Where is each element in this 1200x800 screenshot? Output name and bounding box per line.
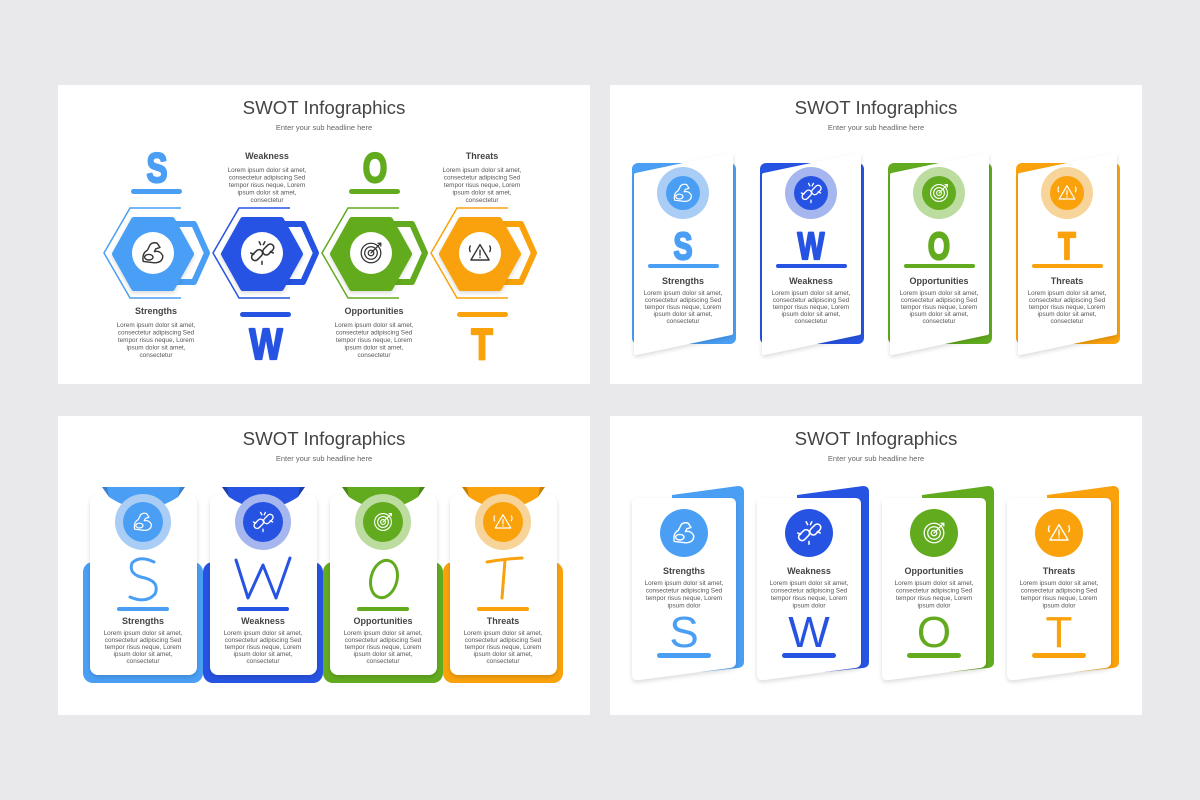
card: weakness: ipsum dolor sit amet,	[234, 651, 293, 658]
card: strengths: ipsum dolor sit amet,	[114, 651, 173, 658]
card: weakness: ipsum dolor sit amet,	[782, 311, 841, 318]
item: threats hexagon: Threats	[466, 151, 498, 161]
card: opportunities: consectetur adipiscing Sed	[901, 297, 978, 304]
card: strengths: consectetur	[666, 318, 700, 325]
subtitle: Enter your sub headline here	[828, 454, 924, 463]
card: weakness: Lorem ipsum dolor sit amet,	[772, 290, 851, 297]
item: threats hexagon	[431, 151, 534, 369]
card: strengths: consectetur adipiscing Sed	[105, 637, 182, 644]
item: opportunities hexagon: consectetur adipiscing Sed	[336, 330, 413, 336]
card: strengths: Lorem ipsum dolor sit amet,	[644, 290, 723, 297]
item: threats hexagon: consectetur adipiscing Sed	[444, 174, 521, 182]
card: strengths	[83, 487, 203, 683]
card: weakness: W	[788, 608, 830, 657]
card: threats: consectetur adipiscing Sed	[1029, 297, 1106, 304]
card: strengths	[632, 486, 744, 680]
card: threats: consectetur adipiscing Sed	[1021, 588, 1098, 594]
card: threats	[443, 487, 563, 683]
card: weakness: Weakness	[787, 566, 831, 576]
card: strengths: S	[673, 226, 693, 268]
card: threats: Threats	[487, 616, 519, 626]
card: weakness: Weakness	[789, 276, 833, 286]
card: strengths: tempor risus neque, Lorem	[646, 595, 722, 602]
card: opportunities	[323, 487, 443, 683]
card: opportunities: Lorem ipsum dolor sit amet,	[895, 580, 974, 587]
item: strengths hexagon: S	[146, 144, 168, 191]
card: opportunities: ipsum dolor	[917, 602, 951, 610]
item: weakness hexagon	[213, 151, 316, 369]
card: opportunities: Opportunities	[354, 616, 412, 626]
item: opportunities hexagon	[322, 144, 425, 359]
item: opportunities hexagon: Lorem ipsum dolor sit amet,	[335, 322, 414, 329]
card: threats: Lorem ipsum dolor sit amet,	[464, 630, 543, 637]
card: weakness: W	[798, 226, 825, 268]
item: weakness hexagon: consectetur	[250, 197, 284, 204]
card: strengths: ipsum dolor	[667, 602, 701, 610]
item: strengths hexagon: tempor risus neque, Lorem	[118, 337, 194, 344]
card: strengths: consectetur adipiscing Sed	[645, 297, 722, 304]
item: weakness hexagon: Weakness	[245, 151, 289, 161]
item: weakness hexagon: tempor risus neque, Lorem	[229, 182, 305, 189]
card: strengths: Strengths	[122, 616, 164, 626]
item: weakness hexagon: W	[249, 320, 283, 369]
card: threats	[1016, 155, 1120, 353]
card: opportunities: O	[928, 226, 950, 268]
card: opportunities: tempor risus neque, Lorem	[345, 644, 421, 651]
card: weakness	[203, 487, 323, 683]
card: strengths: Strengths	[662, 276, 704, 286]
card: threats: ipsum dolor sit amet,	[474, 651, 533, 658]
card: threats	[1007, 486, 1119, 680]
card: threats: Lorem ipsum dolor sit amet,	[1020, 580, 1099, 587]
card: opportunities: consectetur	[922, 318, 956, 325]
card: weakness: consectetur	[246, 658, 280, 665]
card: weakness: Lorem ipsum dolor sit amet,	[770, 580, 849, 587]
panel: hexagon SWOT	[58, 85, 590, 384]
panel: ribbon cards SWOT	[58, 416, 590, 715]
card: strengths: ipsum dolor sit amet,	[654, 311, 713, 318]
card: threats: tempor risus neque, Lorem	[1021, 595, 1097, 602]
item: strengths hexagon: consectetur	[139, 352, 173, 359]
card: opportunities	[882, 486, 994, 680]
card: threats: ipsum dolor sit amet,	[1038, 311, 1097, 318]
card: weakness: consectetur adipiscing Sed	[225, 637, 302, 644]
item: threats hexagon: T	[471, 320, 493, 369]
item: strengths hexagon: consectetur adipiscing Sed	[118, 330, 195, 336]
card: opportunities: ipsum dolor sit amet,	[354, 651, 413, 658]
card: threats: consectetur	[1050, 318, 1084, 325]
card: opportunities: consectetur adipiscing Sed	[896, 588, 973, 594]
item: weakness hexagon: ipsum dolor sit amet,	[238, 190, 297, 196]
item: opportunities hexagon: O	[363, 144, 387, 191]
card: opportunities: tempor risus neque, Lorem	[896, 595, 972, 602]
card: threats: consectetur	[486, 658, 520, 665]
card: opportunities: Lorem ipsum dolor sit amet,	[344, 630, 423, 637]
card: threats: Lorem ipsum dolor sit amet,	[1028, 290, 1107, 297]
card: opportunities: Lorem ipsum dolor sit amet,	[900, 290, 979, 297]
item: strengths hexagon: ipsum dolor sit amet,	[127, 344, 186, 352]
card: threats: T	[1058, 226, 1076, 268]
panel: tilted cards SWOT	[610, 85, 1142, 384]
card: weakness: Lorem ipsum dolor sit amet,	[224, 630, 303, 637]
item: opportunities hexagon: ipsum dolor sit amet,	[345, 344, 404, 352]
card: opportunities: Opportunities	[904, 566, 964, 576]
card: threats: Threats	[1051, 276, 1083, 286]
card: strengths: Lorem ipsum dolor sit amet,	[645, 580, 724, 587]
item: strengths hexagon	[104, 144, 207, 359]
card: threats: consectetur adipiscing Sed	[465, 637, 542, 644]
card: opportunities: consectetur adipiscing Sed	[345, 637, 422, 644]
item: weakness hexagon: Lorem ipsum dolor sit amet,	[228, 167, 307, 174]
card: weakness	[760, 155, 864, 353]
title: SWOT Infographics	[795, 97, 957, 118]
card: weakness: consectetur adipiscing Sed	[771, 588, 848, 594]
subtitle: Enter your sub headline here	[828, 123, 924, 132]
card: strengths: consectetur	[126, 658, 160, 665]
item: strengths hexagon: Strengths	[135, 306, 177, 316]
card: weakness: consectetur	[794, 318, 828, 325]
card: opportunities: ipsum dolor sit amet,	[910, 311, 969, 318]
item: threats hexagon: tempor risus neque, Lorem	[444, 182, 520, 189]
card: threats: tempor risus neque, Lorem	[1029, 304, 1105, 311]
item: threats hexagon: Lorem ipsum dolor sit amet,	[443, 167, 522, 174]
card: weakness: tempor risus neque, Lorem	[773, 304, 849, 311]
subtitle: Enter your sub headline here	[276, 123, 372, 132]
item: threats hexagon: consectetur	[465, 197, 499, 204]
card: opportunities: O	[917, 608, 951, 657]
card: opportunities	[888, 155, 992, 353]
card: weakness: tempor risus neque, Lorem	[225, 644, 301, 651]
card: strengths: Strengths	[663, 566, 705, 576]
card: threats: tempor risus neque, Lorem	[465, 644, 541, 651]
card: opportunities: tempor risus neque, Lorem	[901, 304, 977, 311]
card: threats: ipsum dolor	[1042, 602, 1076, 610]
card: strengths: Lorem ipsum dolor sit amet,	[104, 630, 183, 637]
item: opportunities hexagon: tempor risus neque, Lorem	[336, 337, 412, 344]
card: strengths	[632, 155, 736, 353]
card: strengths: S	[669, 608, 699, 657]
item: weakness hexagon: consectetur adipiscing Sed	[229, 174, 306, 182]
card: strengths: consectetur adipiscing Sed	[646, 588, 723, 594]
card: weakness: consectetur adipiscing Sed	[773, 297, 850, 304]
card: threats: Threats	[1043, 566, 1075, 576]
card: weakness: Weakness	[241, 616, 285, 626]
title: SWOT Infographics	[243, 97, 405, 118]
title: SWOT Infographics	[795, 428, 957, 449]
card: opportunities: Opportunities	[910, 276, 968, 286]
card: weakness: tempor risus neque, Lorem	[771, 595, 847, 602]
title: SWOT Infographics	[243, 428, 405, 449]
item: opportunities hexagon: Opportunities	[344, 306, 404, 316]
item: opportunities hexagon: consectetur	[357, 352, 391, 359]
card: strengths: tempor risus neque, Lorem	[645, 304, 721, 311]
item: strengths hexagon: Lorem ipsum dolor sit amet,	[117, 322, 196, 329]
panel: folder cards SWOT	[610, 416, 1142, 715]
item: threats hexagon: ipsum dolor sit amet,	[453, 190, 512, 196]
card: weakness: ipsum dolor	[792, 602, 826, 610]
card: threats: T	[1046, 608, 1072, 657]
card: strengths: tempor risus neque, Lorem	[105, 644, 181, 651]
subtitle: Enter your sub headline here	[276, 454, 372, 463]
card: opportunities: consectetur	[366, 658, 400, 665]
card: weakness	[757, 486, 869, 680]
